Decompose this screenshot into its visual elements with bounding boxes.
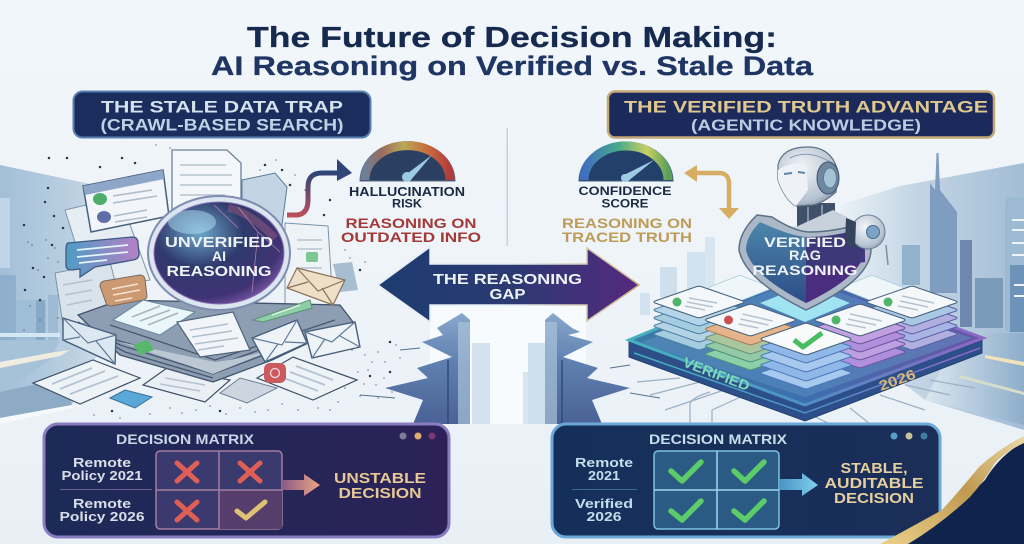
panel: left decision matrix — [44, 424, 449, 537]
panel: right decision matrix: 2026 — [586, 509, 622, 524]
stacked pile base — [78, 300, 353, 382]
panel: right decision matrix: Remote — [575, 455, 633, 470]
panel: right decision matrix: Verified — [575, 496, 633, 511]
panel: right decision matrix: DECISION — [834, 490, 914, 507]
robot and shield: verified RAG reasoning: REASONING — [752, 262, 858, 278]
corner ribbon: gold swoosh — [880, 436, 1024, 544]
tall document — [172, 150, 241, 230]
left header: the stale data trap: THE STALE DATA TRAP — [101, 98, 343, 116]
double arrow: the reasoning gap — [378, 247, 639, 322]
double arrow: the reasoning gap: GAP — [490, 286, 526, 303]
label: reasoning on traced truth — [562, 215, 692, 245]
right header: the verified truth advantage: THE VERIFIED TRUTH ADVANTAGE — [624, 98, 988, 116]
label: reasoning on traced truth: REASONING ON — [562, 215, 692, 231]
envelope: left — [63, 318, 116, 364]
orange chat card — [100, 275, 147, 306]
panel: right decision matrix: 2021 — [588, 468, 620, 483]
right header: the verified truth advantage — [608, 92, 994, 138]
red badge — [264, 363, 286, 383]
shield — [739, 215, 871, 310]
title: The Future of Decision Making: — [247, 22, 777, 54]
panel: left decision matrix: Policy 2026 — [60, 509, 144, 524]
label: reasoning on outdated info: REASONING ON — [346, 215, 476, 231]
envelope: middle — [252, 320, 307, 362]
card stack: left — [654, 286, 744, 350]
green tag — [133, 340, 154, 355]
title — [211, 22, 814, 81]
left cliff — [385, 313, 470, 424]
card stack: right — [867, 286, 957, 350]
panel: right decision matrix: AUDITABLE — [824, 475, 924, 492]
left header: the stale data trap: (CRAWL-BASED SEARCH) — [100, 116, 344, 134]
green note — [253, 300, 312, 322]
label: reasoning on outdated info: OUTDATED INFO — [341, 229, 481, 245]
arrow: orb to hallucination risk — [287, 159, 352, 215]
chasm and cracked cliffs — [360, 304, 660, 424]
platform: verified 2026: 2026 — [877, 366, 918, 394]
circuit traces under platform — [637, 378, 975, 424]
orb: unverified AI reasoning: AI — [212, 248, 226, 264]
robot — [763, 147, 888, 265]
arrow: confidence score to shield — [684, 165, 739, 219]
browser chat window — [83, 170, 169, 232]
bottom paper: far left — [33, 360, 140, 404]
back documents — [242, 173, 287, 225]
ground cracks — [360, 348, 660, 398]
gauge: confidence score — [579, 142, 673, 182]
floating paper: upper left — [113, 300, 195, 335]
right header: the verified truth advantage: (AGENTIC KNOWLEDGE) — [691, 118, 921, 134]
label: confidence score: SCORE — [602, 196, 648, 210]
bottom paper: right — [257, 357, 357, 400]
robot and shield: verified RAG reasoning: VERIFIED — [764, 234, 846, 250]
panel: left decision matrix: DECISION MATRIX — [116, 431, 255, 447]
right cliff — [545, 313, 630, 424]
blue tag — [110, 390, 152, 408]
robot arm — [851, 215, 885, 249]
card stack: middle left — [706, 304, 796, 370]
panel: left decision matrix: Remote — [73, 455, 131, 470]
platform: verified 2026: VERIFIED — [681, 354, 752, 394]
label: hallucination risk — [349, 185, 465, 210]
robot and shield: verified RAG reasoning — [739, 147, 888, 310]
panel: right decision matrix: DECISION MATRIX — [649, 431, 788, 447]
glow under shield — [760, 285, 850, 322]
card stack: back left — [708, 275, 772, 301]
bottom paper: middle — [143, 368, 230, 402]
scattered debris speckles — [24, 158, 390, 411]
panel: left decision matrix: Policy 2021 — [62, 468, 142, 483]
label: confidence score: CONFIDENCE — [578, 184, 672, 198]
label: reasoning on traced truth: TRACED TRUTH — [562, 229, 692, 245]
left header: the stale data trap — [74, 92, 370, 138]
panel: right decision matrix — [552, 424, 940, 537]
left city skyline — [0, 165, 125, 424]
card stack: front with green check — [761, 323, 851, 389]
paper pile: crawled documents, chats and emails — [24, 145, 400, 418]
orb: unverified AI reasoning: UNVERIFIED — [165, 235, 273, 251]
orb: unverified AI reasoning — [148, 196, 290, 310]
purple chat bubble — [66, 237, 139, 277]
centre divider line — [506, 128, 508, 246]
panel: right decision matrix: STABLE, — [840, 460, 908, 477]
panel: left decision matrix: DECISION — [338, 485, 422, 502]
label: hallucination risk: RISK — [392, 196, 422, 210]
card stack: middle right — [815, 304, 905, 368]
label: reasoning on outdated info — [341, 215, 481, 245]
gauge: hallucination risk — [360, 142, 455, 182]
double arrow: the reasoning gap: THE REASONING — [433, 271, 582, 288]
orb: unverified AI reasoning: REASONING — [166, 264, 272, 280]
robot and shield: verified RAG reasoning: RAG — [789, 247, 821, 263]
envelope: right — [305, 322, 360, 358]
card stack: back right — [840, 275, 904, 301]
paper: centre — [177, 312, 250, 357]
panel: left decision matrix: Remote — [73, 496, 131, 511]
label: hallucination risk: HALLUCINATION — [349, 185, 465, 199]
label: confidence score — [578, 184, 672, 210]
panel: left decision matrix: UNSTABLE — [334, 470, 426, 487]
title: AI Reasoning on Verified vs. Stale Data — [211, 51, 814, 81]
platform: verified 2026 — [629, 270, 983, 421]
envelope: tan — [287, 268, 345, 305]
right city skyline — [640, 153, 1024, 430]
